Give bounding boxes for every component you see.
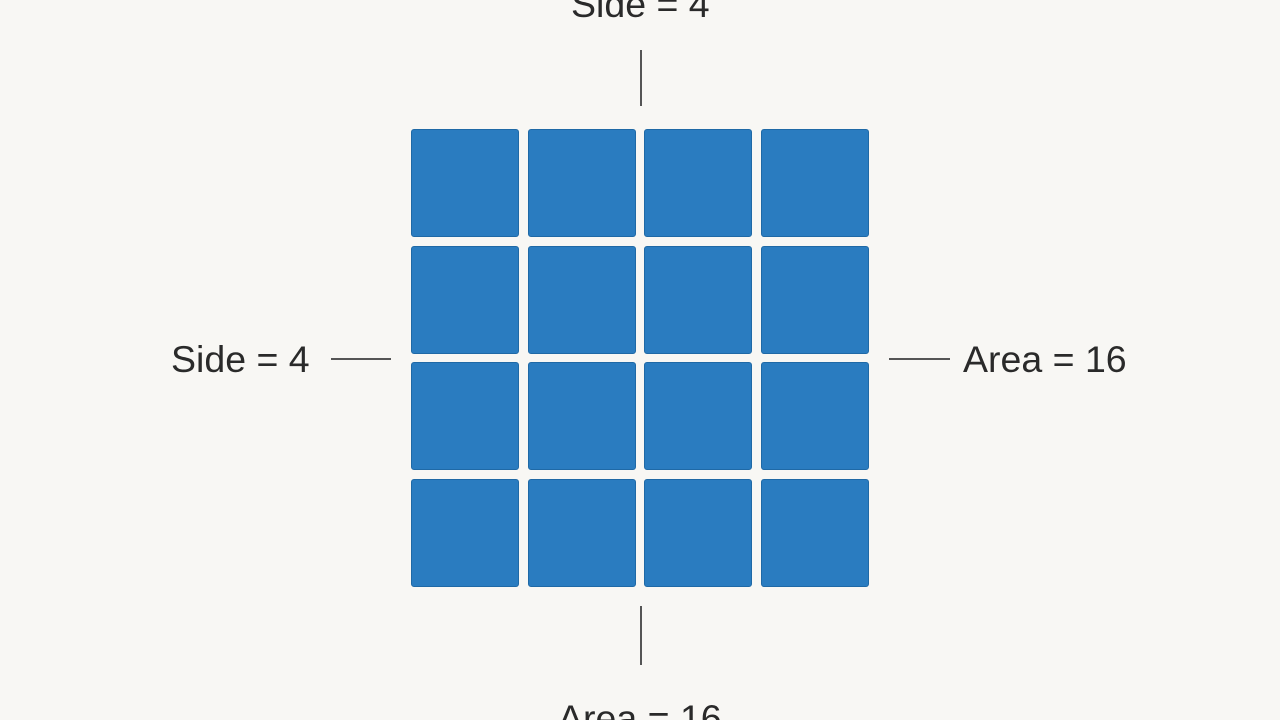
line: left connector bbox=[331, 358, 391, 360]
line: bottom connector bbox=[640, 606, 642, 665]
label: right area: Area = 16 bbox=[963, 338, 1127, 380]
line: right connector bbox=[889, 358, 950, 360]
grid: 4x4 unit squares bbox=[411, 129, 869, 587]
label: left side: Side = 4 bbox=[171, 338, 310, 380]
line: top connector bbox=[640, 50, 642, 106]
